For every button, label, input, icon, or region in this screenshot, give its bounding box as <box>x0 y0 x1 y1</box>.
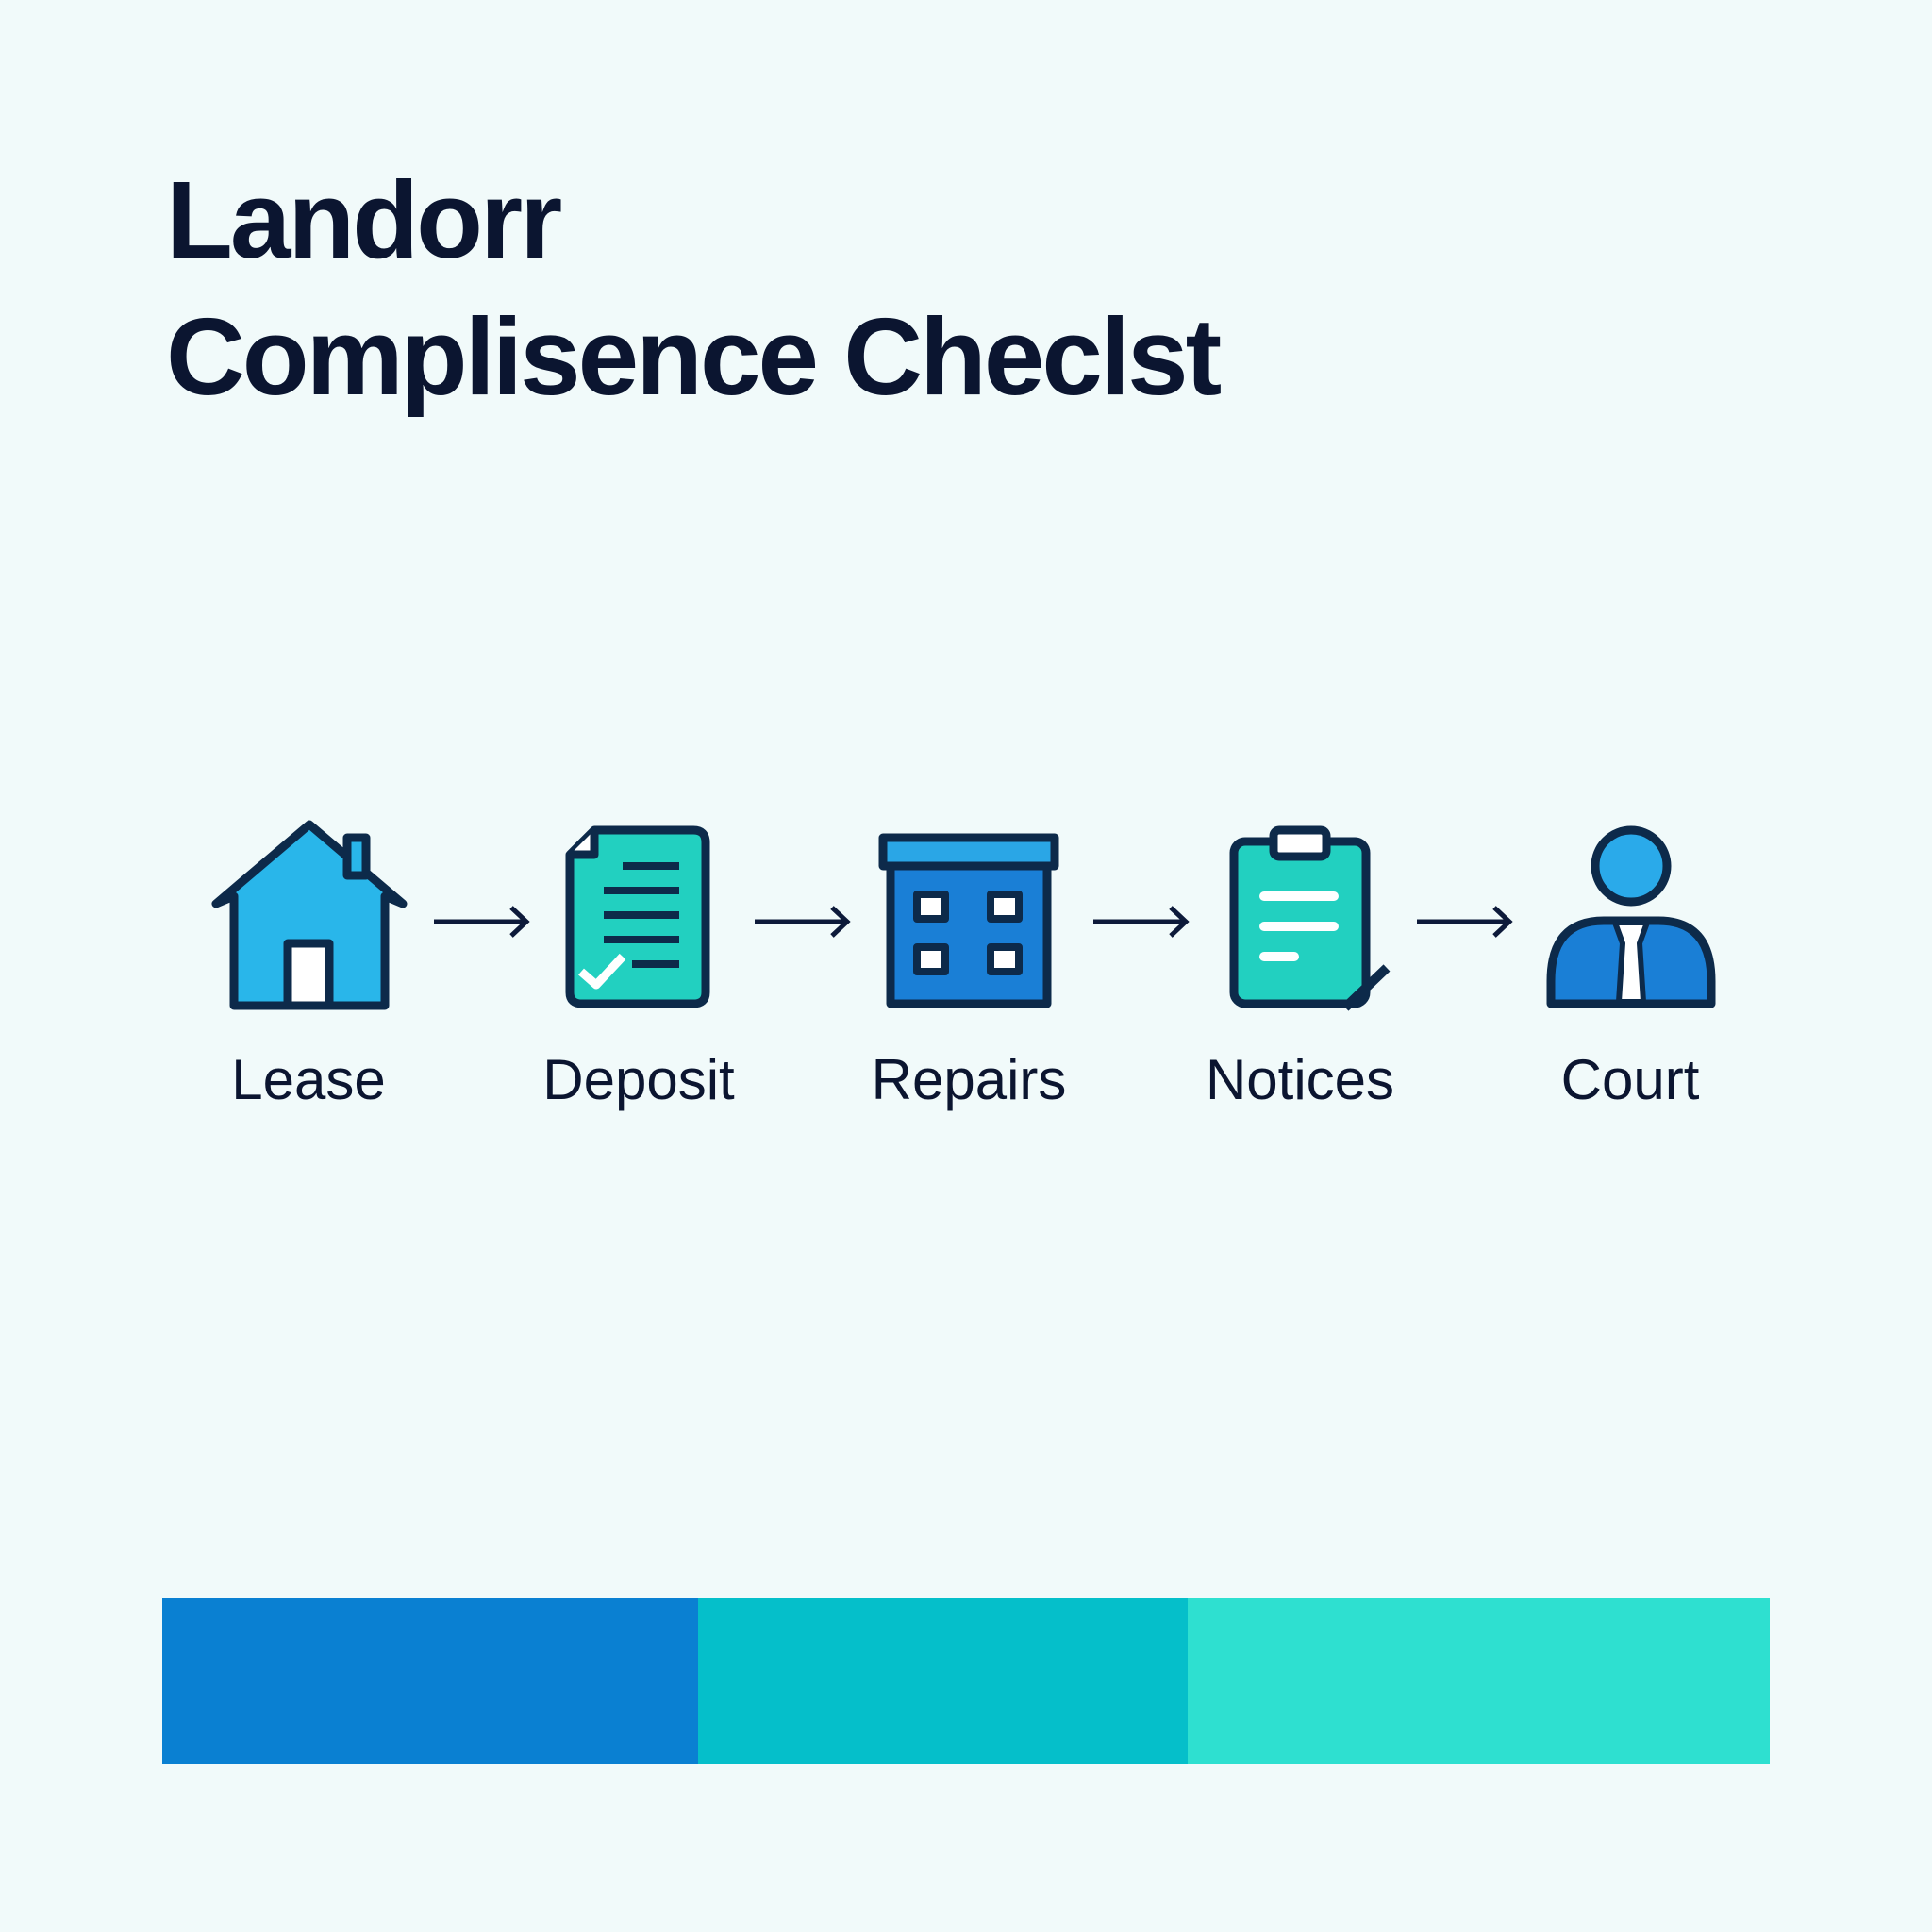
label: Deposit: Deposit <box>542 1048 735 1111</box>
icon: court person <box>1551 830 1711 1004</box>
bar segment 3 <box>1188 1598 1770 1764</box>
title: Landorr <box>166 158 559 281</box>
bar segment 1 <box>162 1598 698 1764</box>
label: Court: Court <box>1561 1048 1699 1111</box>
label: Lease: Lease <box>231 1048 386 1111</box>
icon: house <box>216 824 403 1006</box>
arrow 2 <box>755 908 847 936</box>
icon: repairs building <box>883 838 1055 1004</box>
label: Repairs: Repairs <box>872 1048 1066 1111</box>
arrow 4 <box>1417 908 1509 936</box>
icon: notices clipboard <box>1234 830 1387 1008</box>
icon: deposit document <box>570 830 706 1004</box>
arrow 1 <box>434 908 526 936</box>
gradient bar <box>162 1598 1770 1764</box>
title: Complisence Checlst <box>166 295 1219 418</box>
label: Notices: Notices <box>1206 1048 1394 1111</box>
arrow 3 <box>1093 908 1186 936</box>
bar segment 2 <box>698 1598 1188 1764</box>
process flow <box>211 821 1715 1011</box>
title <box>166 158 1221 418</box>
